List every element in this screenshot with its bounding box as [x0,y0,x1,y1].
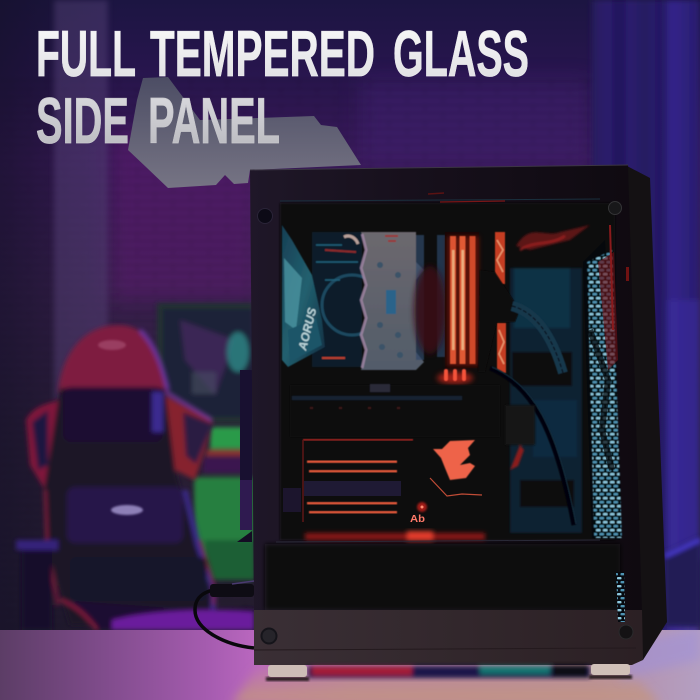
tower: AORUS VRM shroud: AORUS [295,306,319,353]
title: second line [36,84,280,157]
chair: left wing [26,400,60,500]
chair: top cushion [63,387,163,442]
tower: CPU heatsink [361,232,445,370]
tower: RAM base red LEDs [437,369,473,384]
background: small monitor stand and panel [237,370,252,542]
tower: thumb screws [258,202,633,644]
tower: VRM red glowing strip [495,232,506,373]
tower: PCIe slots [283,439,413,522]
title [36,17,529,157]
grey shard behind title [128,77,361,188]
tower: CPU fan area [312,232,382,367]
tower: window bottom red reflection [305,531,485,541]
power cable [195,581,254,648]
tower: wood base strip [254,610,643,665]
tower: graphics card [290,384,500,437]
tower: floor RGB reflection [308,665,590,678]
chair: back silhouette [44,388,212,625]
tower: rear chamber blue plate [510,268,582,533]
gaming chair [16,325,254,630]
desk surface [0,628,700,700]
tower: debug LED display [410,502,427,525]
tower: window interior [280,203,615,540]
background: curtain [592,0,700,640]
tower: PSU wires lower [505,405,535,470]
tower: 24-pin connector and cables [478,270,576,525]
tower: debug LED display: Ab [410,514,425,525]
title: first line: FULL [36,17,136,90]
chair: right wing [160,392,213,480]
tower: feet [266,664,632,681]
tower: lower dark band [265,544,620,610]
title: second line: SIDE [36,84,129,157]
tower: side panel [627,166,667,660]
tower: top edge highlight [250,165,628,170]
tower: RAM sticks glowing [445,232,479,368]
chair: lumbar pillow [67,487,183,543]
background: monitor [157,303,253,423]
PC tower [250,165,667,681]
chair: seat [60,600,254,630]
background: green glow desk [194,427,255,580]
tower: front glass [250,165,642,610]
tower: lower mesh glimmer [616,572,625,622]
chair: logos [98,340,126,350]
chair: headrest [58,325,168,392]
title: first line: TEMPERED [150,17,375,90]
background: blue chair at right [665,536,700,626]
tower: red cables top right [516,225,590,250]
title: first line: GLASS [393,17,529,90]
title: second line: PANEL [148,84,280,157]
chair: arm [16,540,58,550]
background: pale column [54,0,108,400]
tower: CPU rear fan red glow [414,266,446,354]
tower: AORUS VRM shroud [282,225,325,367]
tower: front fan mesh [583,225,629,540]
tower: AORUS eagle logo [430,440,482,496]
chair: lower cushion [70,557,207,601]
